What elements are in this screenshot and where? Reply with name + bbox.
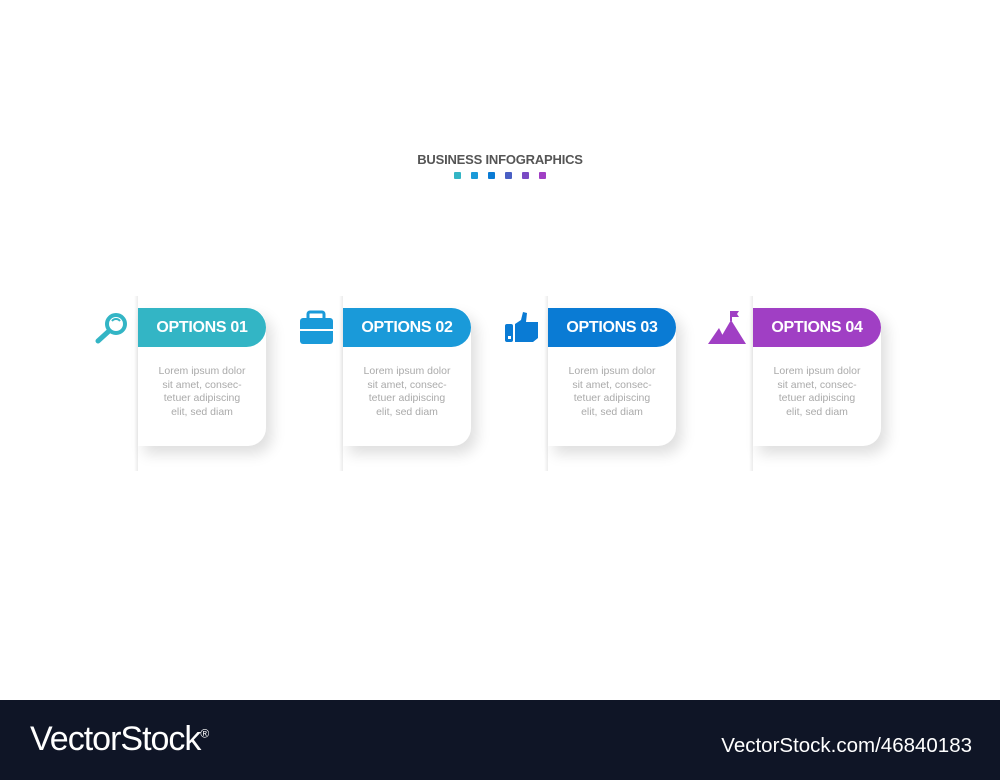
- icon: briefcase: [300, 310, 333, 344]
- title: BUSINESS INFOGRAPHICS: [417, 152, 583, 167]
- icon: thumbs up: [505, 312, 538, 342]
- panel: option 03: sit amet, consec-: [572, 379, 652, 391]
- panel: option 01: tetuer adipiscing: [164, 392, 240, 404]
- panel: option 01: elit, sed diam: [171, 406, 233, 418]
- panel: option 04: Lorem ipsum dolor: [774, 365, 860, 377]
- panel: option 02: [343, 308, 471, 446]
- panel: option 02: tetuer adipiscing: [369, 392, 445, 404]
- icon: mountain flag: [708, 311, 746, 344]
- title dots: [454, 172, 546, 179]
- panel: option 04: tetuer adipiscing: [779, 392, 855, 404]
- panel: option 02: elit, sed diam: [376, 406, 438, 418]
- footer logo: VectorStock®: [30, 720, 208, 758]
- panel: option 01: Lorem ipsum dolor: [159, 365, 245, 377]
- panel: option 02: sit amet, consec-: [367, 379, 447, 391]
- footer bar: [0, 700, 1000, 780]
- footer id: VectorStock.com/46840183: [721, 734, 972, 757]
- panel: option 04: [753, 308, 881, 446]
- panel: option 02: OPTIONS 02: [361, 319, 453, 336]
- panel: option 04: elit, sed diam: [786, 406, 848, 418]
- panel: option 04: sit amet, consec-: [777, 379, 857, 391]
- panel: option 02: Lorem ipsum dolor: [364, 365, 450, 377]
- panel: option 01: sit amet, consec-: [162, 379, 242, 391]
- panel: option 04: OPTIONS 04: [771, 319, 863, 336]
- panel: option 01: OPTIONS 01: [156, 319, 248, 336]
- panel: option 01: [138, 308, 266, 446]
- panel: option 03: elit, sed diam: [581, 406, 643, 418]
- panel: option 03: OPTIONS 03: [566, 319, 658, 336]
- panel: option 03: Lorem ipsum dolor: [569, 365, 655, 377]
- icon: magnifier: [96, 313, 127, 344]
- panel: option 03: [548, 308, 676, 446]
- panel: option 03: tetuer adipiscing: [574, 392, 650, 404]
